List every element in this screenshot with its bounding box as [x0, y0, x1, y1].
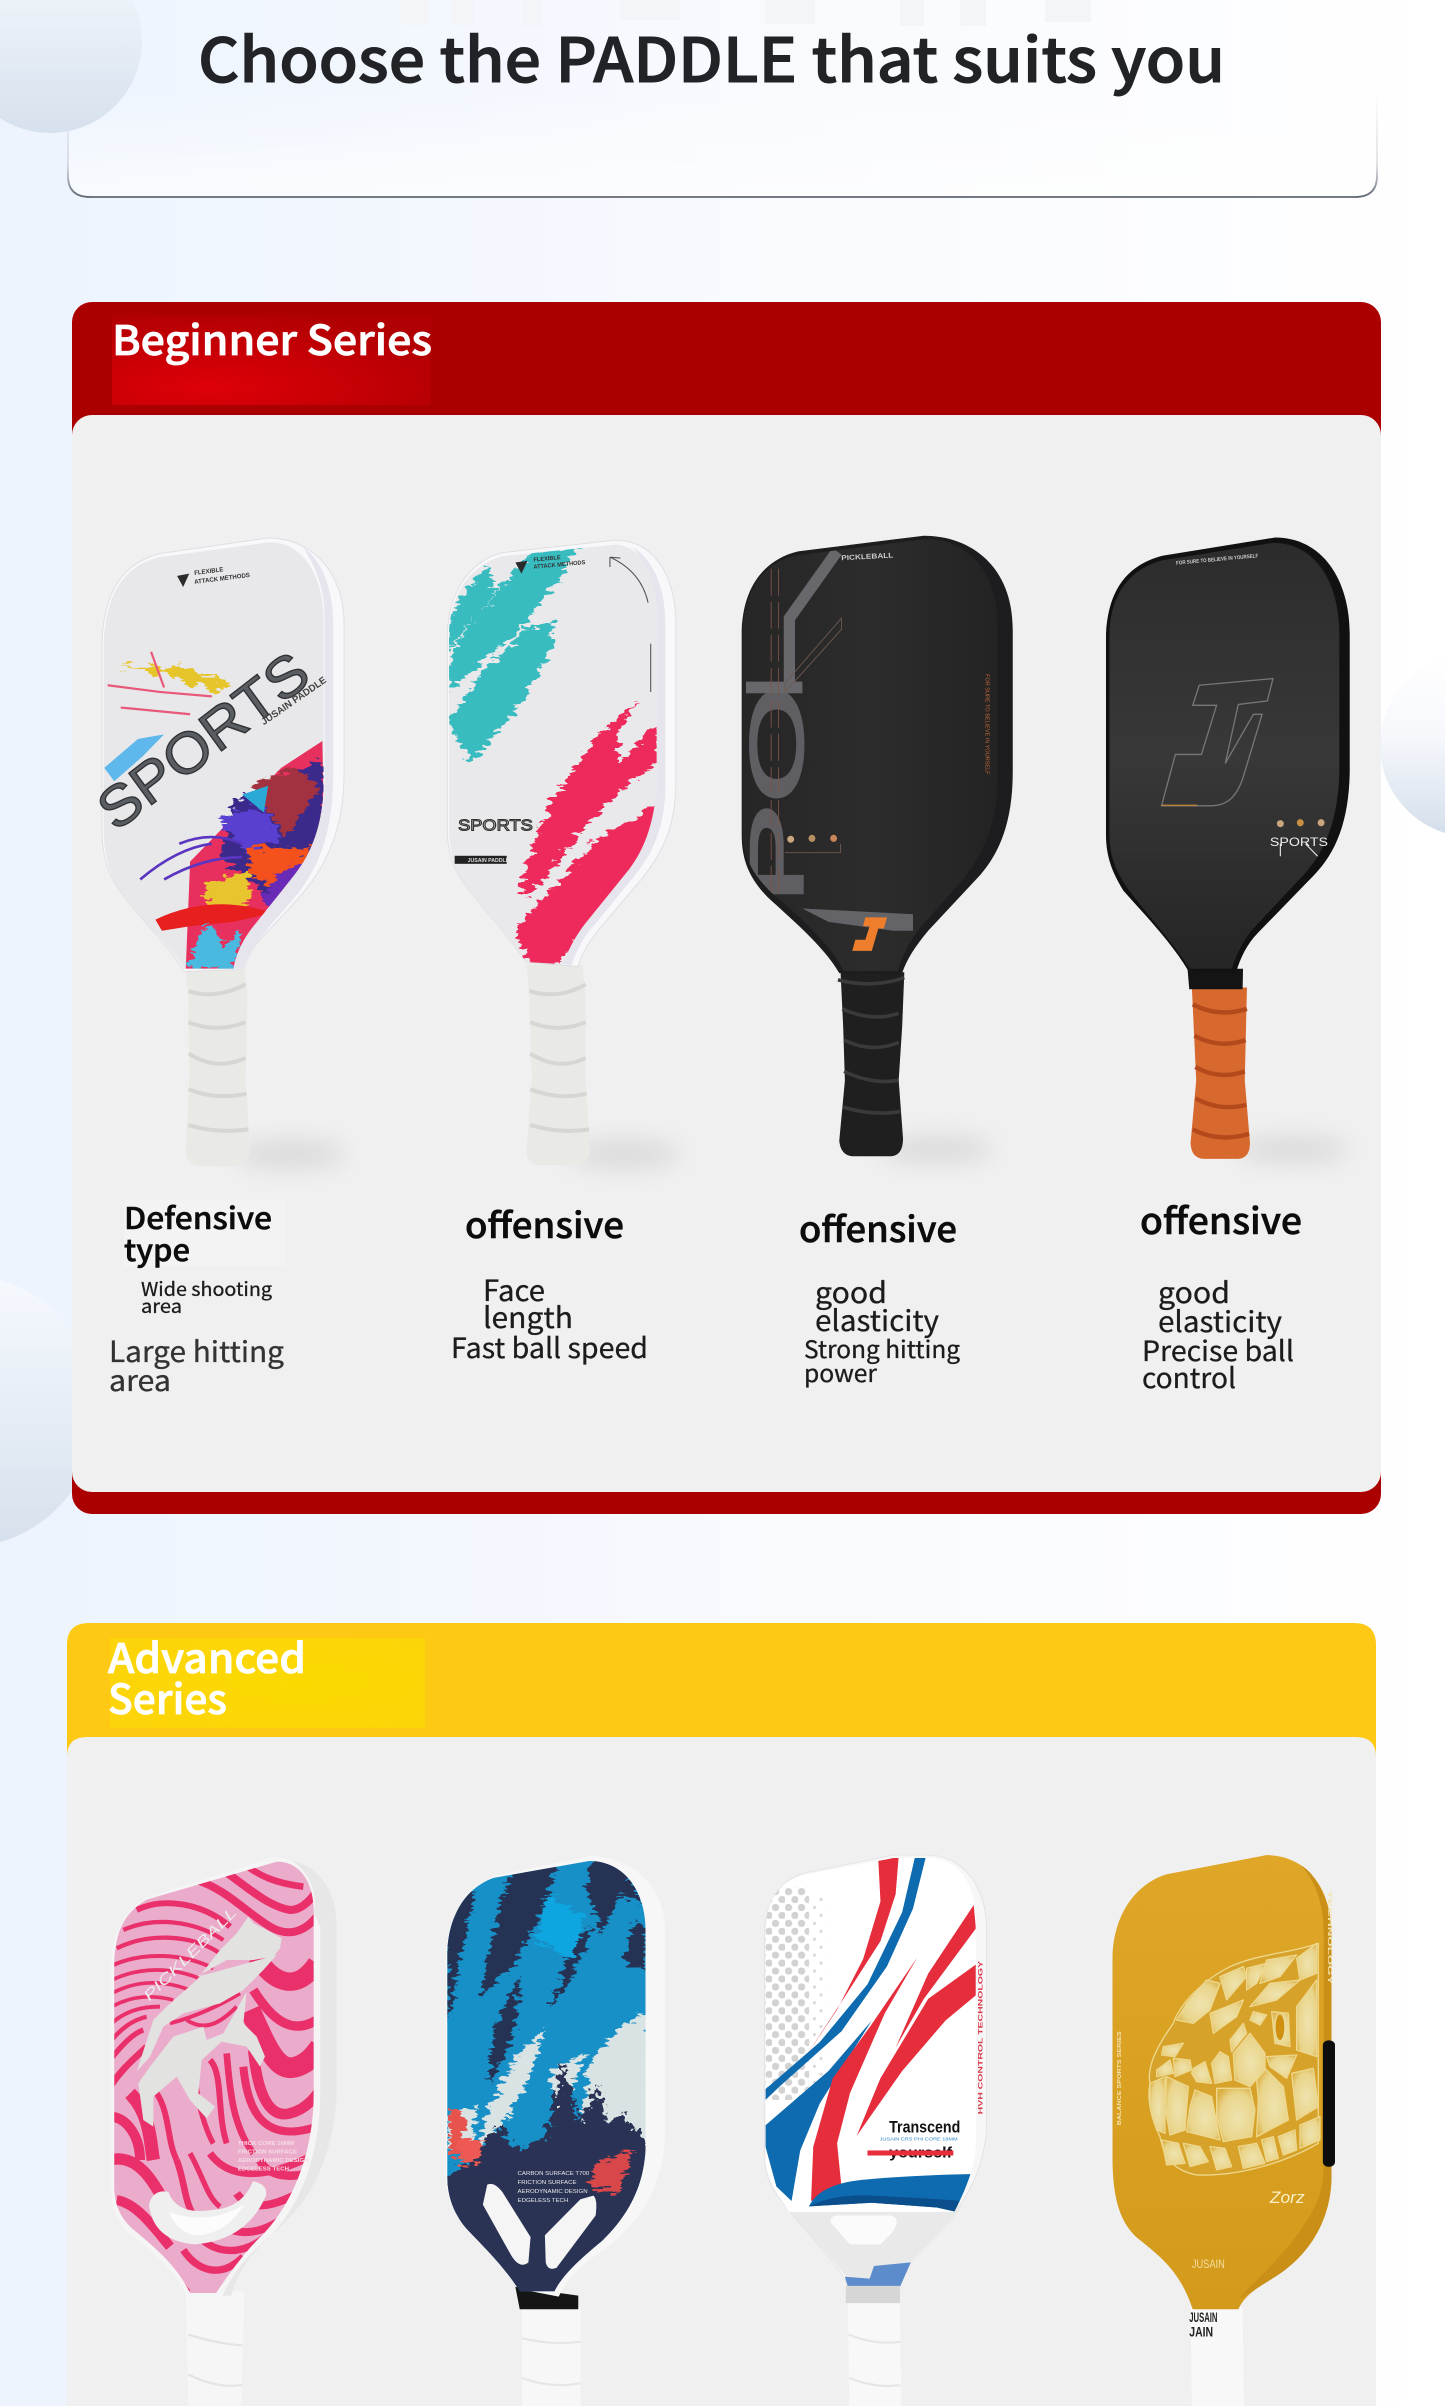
label: offensive column 2: offensive [465, 1198, 624, 1249]
paddle 6: blue brush and mountains [447, 1861, 646, 2386]
paddle 8: gold snake: TECHNOLOGY [1326, 1891, 1332, 1986]
label: strong hitting power: Strong hitting [804, 1330, 960, 1365]
label: large hitting area: Large hitting [109, 1329, 284, 1371]
label: wide shooting area: area [141, 1292, 182, 1319]
paddle 5: pink cat: PICKLEBALL [141, 1905, 241, 2005]
paddle 6: blue brush and mountains: FRICTION SURFACE [518, 2180, 577, 2186]
decorative circle: left edge [0, 1274, 98, 1548]
paddle 7: Transcend red white blue: Transcend [889, 2117, 960, 2136]
inner light panel [67, 1737, 1376, 2406]
heading: Beginner Series: Beginner Series [112, 307, 432, 367]
label: large hitting area: area [109, 1358, 171, 1400]
label line: Defensive type: Defensive [124, 1194, 272, 1238]
paddle 7: Transcend red white blue: JUSAIN CRS PHI CORE 16MM [880, 2137, 958, 2142]
decorative circle: right edge [1380, 653, 1445, 837]
panel: Advanced Series [67, 1623, 1376, 2406]
paddle 5: pink cat: EDGELESS TECH [238, 2167, 289, 2172]
heading: Advanced Series: Advanced [108, 1625, 306, 1685]
paddle 2: white teal and pink brush [447, 540, 680, 1168]
label: face length: length [483, 1295, 573, 1337]
header highlight patch [110, 1638, 425, 1728]
yellow header card [67, 1623, 1376, 2406]
paddle 2: white teal and pink brush: SPORTS [458, 817, 533, 834]
snake head illustration [1149, 1943, 1320, 2175]
paddle 1: white SPORTS splash: SPORTS [85, 639, 321, 842]
paddle 4: black TJ carbon with orange grip [1106, 537, 1350, 1163]
paddle 3: black SPORT carbon: FOR SURE TO BELIEVE IN YOURSELF [983, 674, 989, 775]
label: fast ball speed: Fast ball speed [451, 1327, 648, 1367]
paddle 6: blue brush and mountains: EDGELESS TECH [518, 2198, 568, 2204]
panel: Beginner Series [72, 302, 1381, 1514]
label line: Defensive type: type [124, 1226, 190, 1270]
label: good elasticity column 4: good [1158, 1270, 1230, 1312]
label: good elasticity column 3: elasticity [815, 1298, 939, 1340]
paddle 8: gold snake: JUSAIN [1189, 2310, 1217, 2326]
paddle 2: white teal and pink brush: FLEXIBLE [533, 555, 561, 564]
faint watermark lettering [398, 0, 1091, 26]
label: offensive column 4: offensive [1140, 1193, 1302, 1245]
paddle 8: gold snake: JAIN [1189, 2325, 1213, 2340]
paddle 4: black TJ carbon with orange grip: SPORTS [1270, 837, 1329, 849]
paddle 7: Transcend red white blue: HVH CONTROL TECHNOLOGY [978, 1961, 985, 2114]
paddle 2: white teal and pink brush: JUSAIN PADDLE [468, 858, 510, 864]
paddle 1: white SPORTS splash: JUSAIN PADDLE [259, 675, 329, 728]
label: wide shooting area: Wide shooting [141, 1275, 272, 1302]
title panel [68, 90, 1377, 197]
paddle 3: black SPORT carbon: PO [735, 685, 819, 904]
label: precise ball control: control [1142, 1357, 1236, 1397]
paddle 5: pink cat: THICK CORE 16MM [238, 2141, 294, 2147]
title: Choose the PADDLE that suits you [198, 11, 1225, 100]
paddle 3: black SPORT carbon: PICKLEBALL [841, 552, 894, 562]
paddle 1: white SPORTS splash [85, 538, 346, 1168]
paddle 8: gold snake: JUSAIN [1192, 2257, 1225, 2270]
paddle 3: black SPORT carbon [735, 536, 1013, 1163]
label: precise ball control: Precise ball [1142, 1330, 1294, 1370]
inner light panel [72, 415, 1381, 1492]
label: good elasticity column 3: good [815, 1270, 887, 1312]
paddle 6: blue brush and mountains: AERODYNAMIC DESIGN [518, 2189, 588, 2195]
red header card [72, 302, 1381, 1514]
label: good elasticity column 4: elasticity [1158, 1299, 1282, 1341]
paddle 5: pink cat: AERODYNAMIC DESIGN [238, 2158, 309, 2164]
paddle 5: pink cat [110, 1857, 337, 2406]
paddle 6: blue brush and mountains: CARBON SURFACE T700 [518, 2171, 589, 2177]
paddle 7: Transcend red white blue: yourself [889, 2144, 952, 2161]
header highlight patch [112, 315, 431, 405]
paddle 1: white SPORTS splash: ATTACK METHODS [194, 572, 250, 586]
paddle 8: gold snake: Zorz [1269, 2187, 1305, 2206]
paddle 8: gold snake [1112, 1855, 1335, 2406]
label: face length: Face [483, 1268, 545, 1310]
decorative circle: top left [0, 0, 142, 133]
label: offensive column 3: offensive [799, 1202, 957, 1253]
label: strong hitting power: power [804, 1354, 878, 1389]
label: paddle 1 text [124, 1194, 286, 1270]
paddle 7: Transcend red white blue [765, 1855, 987, 2406]
paddle 5: pink cat: FRICTION SURFACE [238, 2150, 297, 2155]
heading: Advanced Series: Series [108, 1666, 227, 1726]
paddle 4: black TJ carbon with orange grip: FOR SURE TO BELIEVE IN YOURSELF [1176, 553, 1259, 567]
paddle 8: gold snake: BALANCE SPORTS SERIES [1117, 2031, 1123, 2125]
paddle 1: white SPORTS splash: FLEXIBLE [194, 566, 224, 577]
paddle 2: white teal and pink brush: ATTACK METHODS [533, 560, 586, 571]
